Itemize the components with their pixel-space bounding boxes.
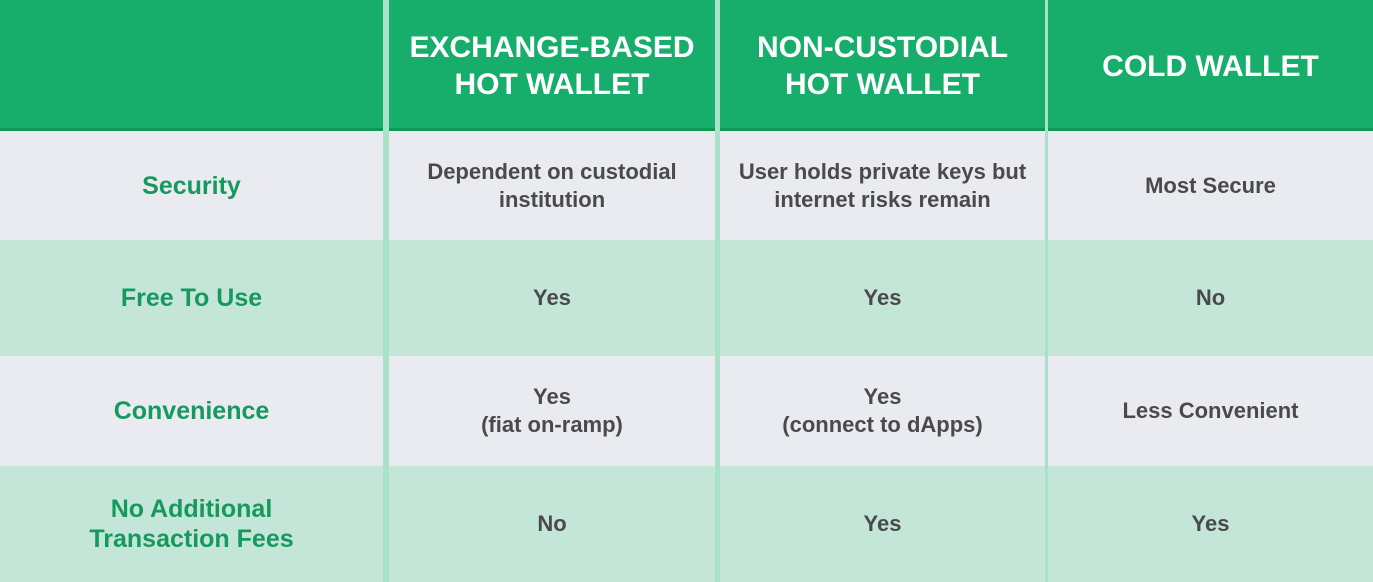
table: (fiat on-ramp) (481, 412, 623, 437)
table: Yes (864, 384, 901, 409)
table: Yes (533, 384, 571, 409)
header: exchange-based hot wallet: EXCHANGE-BASED (409, 31, 695, 64)
table: Transaction Fees (89, 525, 294, 553)
row: security (0, 131, 1373, 240)
table: Free To Use (121, 284, 262, 312)
table: Yes (1192, 511, 1229, 536)
table: Convenience (114, 397, 269, 425)
table: (connect to dApps) (782, 412, 983, 437)
table: User holds private keys but (739, 158, 1026, 184)
table: Security (142, 172, 241, 200)
header: exchange-based hot wallet: HOT WALLET (454, 68, 649, 101)
row: convenience (0, 356, 1373, 466)
table: Yes (533, 285, 571, 310)
header: exchange-based hot wallet (389, 0, 715, 131)
row: no additional transaction fees (0, 466, 1373, 582)
header: non-custodial hot wallet: HOT WALLET (785, 68, 980, 101)
table: Yes (864, 511, 901, 536)
table: No Additional (111, 495, 272, 523)
table: Dependent on custodial (427, 158, 677, 184)
row: free to use (0, 240, 1373, 356)
header: non-custodial hot wallet (720, 0, 1045, 131)
table: internet risks remain (774, 186, 991, 212)
table: institution (499, 186, 605, 212)
table: Yes (864, 285, 901, 310)
table: Most Secure (1145, 172, 1276, 198)
header row (0, 0, 1373, 131)
header: cold wallet (1048, 0, 1373, 131)
table: No (537, 511, 567, 536)
header: cold wallet: COLD WALLET (1102, 50, 1319, 82)
table: Less Convenient (1122, 398, 1299, 423)
table: No (1196, 285, 1225, 310)
header: non-custodial hot wallet: NON-CUSTODIAL (757, 31, 1008, 64)
